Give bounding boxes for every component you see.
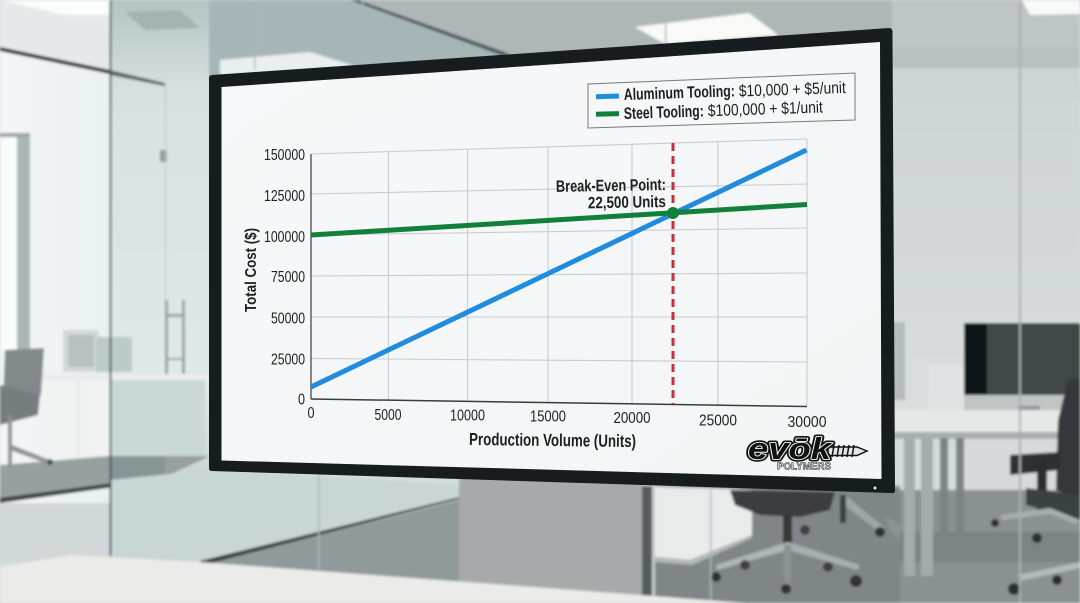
right chair	[991, 378, 1080, 595]
monitor bezel	[209, 28, 895, 493]
x axis labels: 15000	[530, 408, 566, 426]
x axis labels: 20000	[614, 410, 651, 427]
x axis labels	[308, 405, 827, 431]
right floor and table	[892, 490, 1080, 603]
y axis labels: 0	[298, 392, 305, 408]
y axis labels: 75000	[271, 269, 305, 286]
right back monitors	[892, 322, 1080, 416]
y axis title: Total Cost ($)	[243, 228, 260, 312]
logo: Evok Polymers	[748, 431, 867, 472]
pillar	[459, 478, 642, 600]
door handle	[165, 300, 185, 376]
y axis labels: 125000	[264, 188, 305, 205]
grid lines	[311, 139, 807, 406]
x axis labels: 30000	[788, 414, 827, 431]
logo subtitle: POLYMERS	[777, 460, 831, 472]
y axis labels: 25000	[271, 352, 305, 368]
ceiling centre	[209, 0, 892, 78]
legend key: steel	[596, 111, 619, 117]
foreground table	[0, 555, 745, 603]
axes	[311, 154, 807, 406]
logo wordmark: evōk	[748, 431, 833, 466]
y axis labels: 100000	[264, 229, 305, 246]
break-even label: 22,500 Units	[588, 193, 666, 212]
x axis labels: 5000	[374, 407, 402, 424]
y axis labels: 50000	[271, 310, 305, 328]
power indicator	[874, 486, 876, 490]
glass panel tint	[110, 0, 210, 560]
break-even label: Break-Even Point:	[556, 176, 666, 196]
aluminum cost line	[311, 150, 806, 387]
x axis labels: 25000	[699, 412, 737, 430]
back desk	[8, 330, 210, 468]
below screen left room	[110, 470, 460, 562]
steel cost line	[311, 204, 807, 235]
legend value: aluminum: $10,000 + $5/unit	[739, 79, 846, 100]
right wall	[892, 0, 1080, 490]
legend	[588, 73, 855, 128]
y axis labels: 150000	[264, 147, 305, 164]
logo wordmark inline: evōk	[748, 431, 833, 466]
carpet left	[0, 456, 210, 500]
x axis labels: 0	[308, 405, 315, 422]
left room wall	[0, 0, 155, 560]
break-even dashed line	[672, 143, 674, 404]
break-even marker	[667, 207, 679, 219]
logo screw icon	[828, 445, 867, 457]
y axis labels	[264, 147, 305, 408]
display monitor	[209, 28, 895, 493]
x axis title: Production Volume (Units)	[469, 429, 636, 451]
legend value: steel: $100,000 + $1/unit	[708, 98, 823, 120]
screen	[222, 42, 882, 479]
glass verticals	[254, 0, 712, 600]
back chair	[0, 348, 53, 467]
legend key: aluminum	[596, 94, 619, 99]
centre chair	[711, 490, 900, 594]
line chart	[243, 139, 827, 451]
break-even label	[556, 176, 666, 212]
centre floor and cabinet	[655, 486, 900, 603]
legend label: aluminum: Aluminum Tooling:	[624, 82, 735, 104]
x axis labels: 10000	[450, 408, 485, 424]
legend label: steel: Steel Tooling:	[624, 102, 704, 123]
